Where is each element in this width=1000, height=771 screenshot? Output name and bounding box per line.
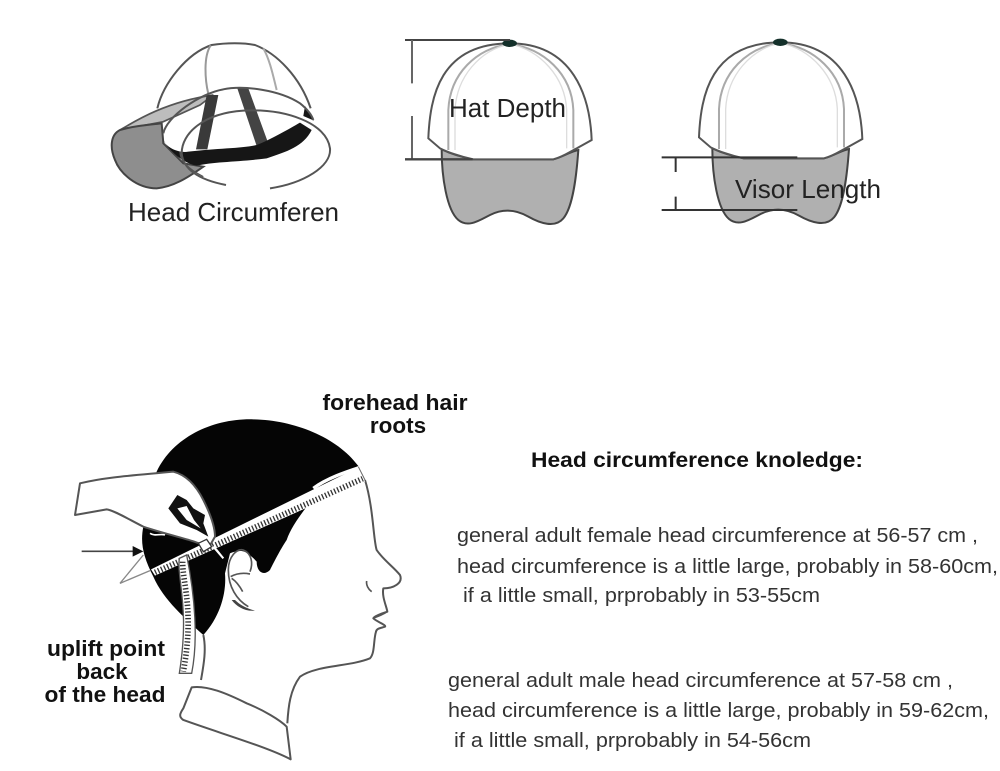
icon: ear xyxy=(228,550,255,611)
label: forehead hair roots: roots xyxy=(370,413,426,438)
icon: visor xyxy=(712,148,849,223)
icon: inner band and straps xyxy=(163,88,314,166)
text block: female head circumference: general adult female head circumference at 56-57 cm , xyxy=(457,524,978,547)
label: forehead hair roots xyxy=(322,390,468,438)
text block: female head circumference xyxy=(457,524,998,607)
label: visor length: Visor Length xyxy=(735,174,881,204)
icon: hair xyxy=(142,419,358,635)
icon: cap crown xyxy=(157,43,311,108)
label: uplift point back of the head: of the head xyxy=(44,682,166,707)
visor length measure lines xyxy=(662,157,797,210)
heading: head circumference knowledge: Head circumference knoledge: xyxy=(531,448,863,472)
text block: male head circumference xyxy=(448,669,989,752)
text block: female head circumference: head circumference is a little large, probably in 58-60cm, xyxy=(457,555,998,578)
label: uplift point back of the head xyxy=(44,636,166,707)
label: head circumference: Head Circumferen xyxy=(128,197,339,227)
icon: visor xyxy=(442,149,578,224)
diagram: head circumference cap xyxy=(112,43,330,188)
label: forehead hair roots: forehead hair xyxy=(322,390,468,415)
icon: crown xyxy=(699,42,862,158)
icon: tape measure across head xyxy=(151,467,365,576)
label: uplift point back of the head: uplift point xyxy=(47,636,166,661)
label: hat depth: Hat Depth xyxy=(449,95,566,123)
icon: crown xyxy=(428,43,592,159)
icon: hand xyxy=(75,472,223,558)
hat depth measure lines xyxy=(405,40,510,159)
icon: button xyxy=(502,40,517,47)
text block: female head circumference: if a little small, prprobably in 53-55cm xyxy=(463,584,820,607)
icon: face and neck outline xyxy=(201,480,401,723)
text block: male head circumference: general adult male head circumference at 57-58 cm , xyxy=(448,669,953,692)
icon: button xyxy=(773,39,788,46)
text block: male head circumference: head circumference is a little large, probably in 59-62cm, xyxy=(448,699,989,722)
icon: collar xyxy=(180,687,291,759)
icon: circumference ring xyxy=(180,110,330,188)
label: uplift point back of the head: back xyxy=(76,659,128,684)
diagram: visor length cap xyxy=(662,39,862,223)
diagram: head profile with tape measure xyxy=(75,419,401,759)
arrow: back of head pointer xyxy=(82,546,150,583)
icon: cap visor xyxy=(112,95,213,188)
text block: male head circumference: if a little small, prprobably in 54-56cm xyxy=(454,729,811,752)
icon: hanging tape end xyxy=(179,555,195,673)
diagram: hat depth cap xyxy=(405,40,592,224)
